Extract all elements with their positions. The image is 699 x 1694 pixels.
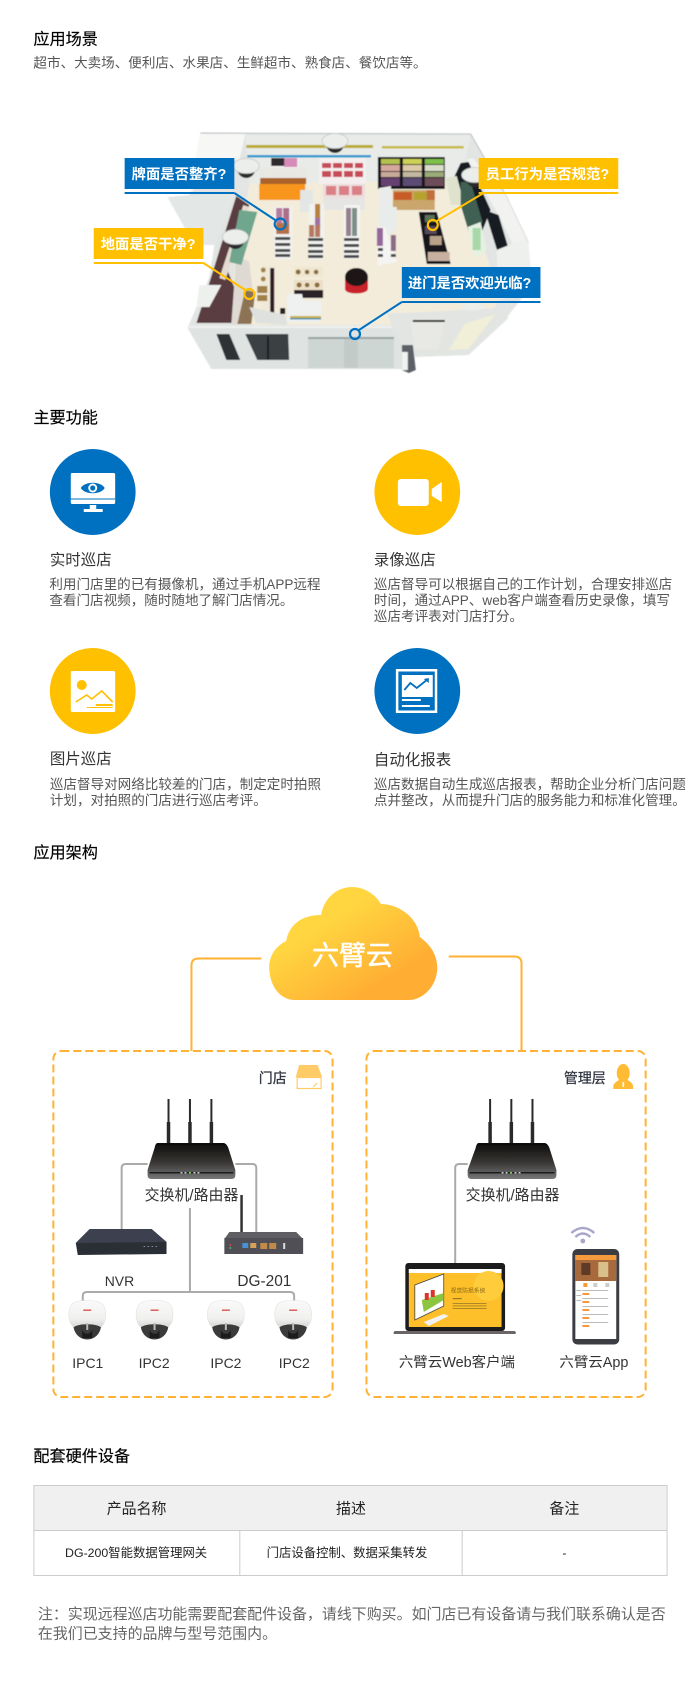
store floor plan illustration — [94, 133, 618, 373]
table: hardware: 描述 — [336, 1500, 366, 1518]
callout: welcome at entrance — [350, 267, 540, 339]
callout: staff behaviour — [428, 158, 618, 230]
cash counter — [287, 294, 321, 322]
note: 在我们已支持的品牌与型号范围内。 — [38, 1625, 277, 1643]
panel: store: DG-201 — [237, 1273, 291, 1290]
connector: cloud to management — [449, 956, 522, 1051]
text: scenario list: 超市、大卖场、便利店、水果店、生鲜超市、熟食店、餐饮店等。 — [33, 54, 427, 71]
panel: store: IPC2 — [139, 1355, 170, 1371]
dark display — [419, 212, 451, 264]
callout: staff behaviour: 员工行为是否规范? — [486, 166, 609, 183]
feature: recorded patrol: 巡店考评表对门店打分。 — [374, 608, 523, 624]
callout: sign tidiness — [125, 158, 286, 230]
architecture diagram — [53, 887, 646, 1397]
cloud: 六臂云 — [312, 941, 393, 971]
lines to cameras — [83, 1208, 294, 1302]
aisle shelves — [274, 207, 292, 259]
icon: monitor with eye — [50, 449, 136, 535]
panel: store: IPC2 — [279, 1355, 310, 1371]
table: hardware: DG-200智能数据管理网关 — [65, 1545, 207, 1560]
panel: store: 交换机/路由器 — [145, 1186, 238, 1204]
panel: store: 门店 — [259, 1070, 287, 1086]
panel: management: 六臂云Web客户端 — [399, 1354, 515, 1371]
device: laptop — [394, 1263, 516, 1334]
panel: store: IPC2 — [210, 1355, 242, 1371]
red drum — [345, 278, 368, 294]
front wall — [187, 327, 402, 369]
panel: management: 六臂云App — [559, 1354, 628, 1371]
icon: wifi — [571, 1228, 594, 1243]
heading: application scenarios: 应用场景 — [33, 29, 98, 49]
orange shelf — [260, 168, 306, 180]
feature: recorded patrol — [374, 449, 672, 624]
device: NVR — [76, 1229, 167, 1255]
feature: automated reports — [374, 648, 686, 808]
feature: live patrol: 实时巡店 — [50, 551, 112, 569]
panel: store: NVR — [105, 1273, 134, 1289]
callout: floor cleanliness: 地面是否干净? — [101, 236, 196, 253]
feature: automated reports: 点并整改，从而提升门店的服务能力和标准化管理。 — [374, 793, 686, 808]
left wall — [196, 196, 249, 323]
icon: report — [374, 648, 460, 734]
device: phone — [572, 1249, 619, 1344]
red goods rack — [319, 158, 366, 184]
heading: application architecture: 应用架构 — [33, 843, 98, 862]
device: laptop: 视觉防损系统 — [451, 1286, 486, 1295]
fridges — [378, 157, 445, 189]
connector: cloud to store — [191, 958, 261, 1051]
callout: floor cleanliness — [94, 228, 254, 299]
feature: recorded patrol: 时间，通过APP、web客户端查看历史录像，填写 — [374, 592, 670, 608]
food islands — [261, 266, 274, 316]
table: hardware: 备注 — [549, 1500, 579, 1518]
panel: management — [366, 1051, 646, 1397]
feature: picture patrol: 计划，对拍照的门店进行巡店考评。 — [50, 793, 267, 808]
icon: person — [613, 1064, 633, 1089]
table: hardware — [34, 1486, 667, 1576]
table: hardware: 门店设备控制、数据采集转发 — [267, 1545, 427, 1560]
feature: live patrol: 查看门店视频，随时随地了解门店情况。 — [49, 593, 293, 608]
feature: live patrol: 利用门店里的已有摄像机，通过手机APP远程 — [49, 577, 321, 592]
callout: welcome at entrance: 进门是否欢迎光临? — [408, 274, 531, 292]
table: hardware: - — [562, 1546, 566, 1560]
right front area — [387, 308, 509, 357]
router — [148, 1099, 235, 1179]
note: 注：实现远程巡店功能需要配套配件设备，请线下购买。如门店已有设备请与我们联系确认是否 — [38, 1606, 666, 1623]
table: hardware: 产品名称 — [107, 1500, 167, 1518]
device: DG-201 gateway — [224, 1195, 303, 1254]
icon: shop — [296, 1065, 322, 1088]
feature: automated reports: 巡店数据自动生成巡店报表，帮助企业分析门店问题 — [374, 776, 686, 792]
panel: management: 交换机/路由器 — [466, 1186, 560, 1204]
feature: picture patrol — [50, 648, 321, 808]
heading: main functions: 主要功能 — [33, 409, 98, 427]
panel: store: IPC1 — [72, 1355, 104, 1371]
router — [468, 1099, 556, 1179]
cloud — [269, 887, 437, 1000]
feature: live patrol — [49, 449, 321, 608]
produce stand — [393, 190, 435, 210]
store 3D model — [168, 133, 530, 373]
callout: sign tidiness: 牌面是否整齐? — [132, 165, 226, 183]
router lines — [122, 1164, 148, 1229]
icon: video camera — [374, 449, 460, 535]
panel: store — [53, 1051, 333, 1397]
router line — [455, 1164, 468, 1263]
feature: recorded patrol: 巡店督导可以根据自己的工作计划，合理安排巡店 — [374, 577, 672, 592]
feature: automated reports: 自动化报表 — [374, 751, 451, 769]
feature: picture patrol: 图片巡店 — [50, 750, 112, 768]
icon: picture — [50, 648, 136, 734]
heading: supporting hardware: 配套硬件设备 — [33, 1447, 130, 1466]
feature: recorded patrol: 录像巡店 — [374, 551, 436, 569]
feature: picture patrol: 巡店督导对网络比较差的门店，制定定时拍照 — [50, 777, 321, 792]
cameras — [69, 1300, 312, 1340]
panel: management: 管理层 — [564, 1070, 606, 1086]
right wall and black shelf — [467, 158, 530, 272]
note — [38, 1606, 666, 1643]
cameras — [322, 134, 348, 153]
